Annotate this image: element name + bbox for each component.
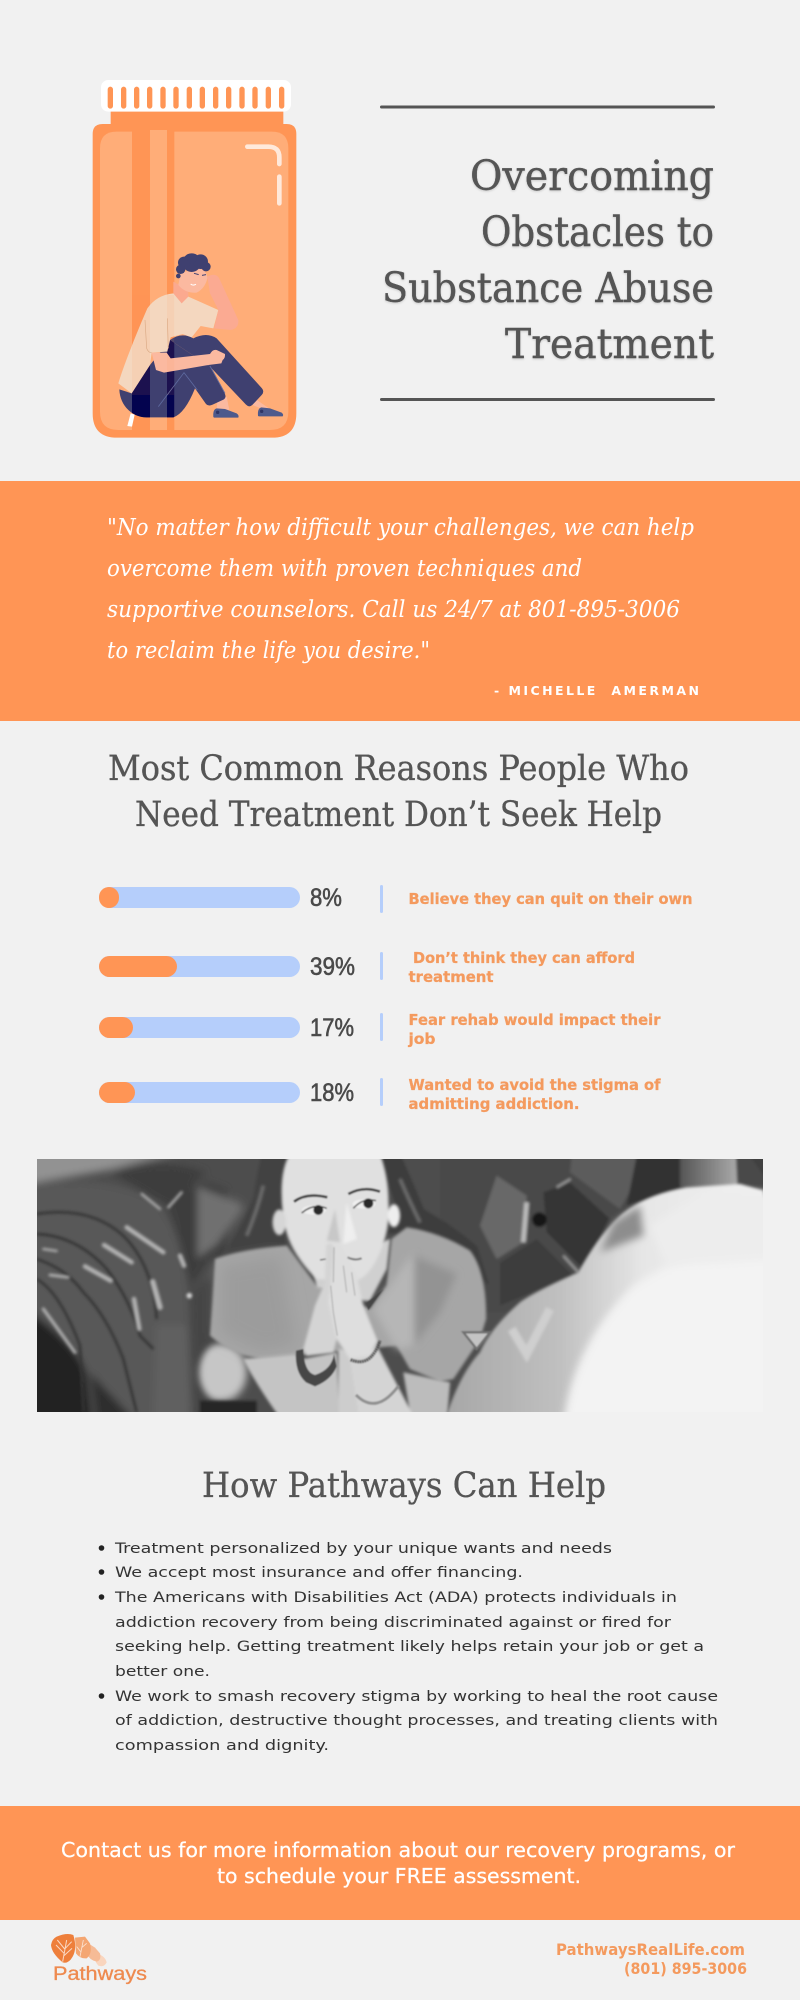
icon: pill bottle with seated person [93, 80, 296, 438]
sofa right [480, 1159, 763, 1304]
hair [230, 1159, 487, 1282]
panel: quote banner [0, 481, 800, 721]
row: 18%: admitting addiction. [408, 1095, 580, 1113]
woman [197, 1146, 489, 1422]
bullet list: better one. [115, 1664, 210, 1680]
bullet list: Treatment personalized by your unique wants and needs [114, 1541, 612, 1557]
hands [303, 1244, 377, 1359]
quote text: to reclaim the life you desire." [107, 638, 430, 664]
logo: Pathways leaves [51, 1934, 147, 1985]
row: 39%: treatment [408, 968, 494, 986]
contact details: PathwaysRealLife.com [556, 1940, 745, 1959]
row: 17%: Fear rehab would impact their [408, 1011, 661, 1029]
quote text [107, 515, 694, 664]
watch and bracelets [296, 1341, 399, 1403]
sofa highlights [43, 1192, 192, 1352]
quote attribution: - MICHELLE AMERMAN [494, 683, 699, 698]
hair [176, 253, 211, 278]
row: 8%: Believe they can quit on their own [408, 890, 692, 908]
row: 39%: 39% [310, 953, 355, 981]
quote text: overcome them with proven techniques and [107, 556, 582, 582]
panel: call to action banner: to schedule your FREE assessment. [217, 1864, 581, 1888]
title rules and heading: Overcoming [470, 152, 714, 200]
bullet list: We accept most insurance and offer financing. [115, 1565, 523, 1581]
row: 17%: 17% [310, 1014, 354, 1042]
arms [243, 1346, 452, 1412]
title rules and heading: Obstacles to [481, 208, 714, 256]
bullet list: addiction recovery from being discriminated against or fired for [115, 1615, 671, 1631]
eyes and brows [294, 1189, 380, 1260]
bottle body [93, 112, 296, 438]
bullet list [99, 1541, 718, 1754]
title rules and heading [380, 106, 715, 401]
title rules and heading: Treatment [505, 320, 714, 368]
row: 8%: 8% [310, 884, 342, 912]
face [273, 1146, 400, 1281]
bullet list: of addiction, destructive thought processes, and treating clients with [115, 1713, 718, 1729]
bullet list: seeking help. Getting treatment likely helps retain your job or get a [115, 1639, 704, 1655]
row: 18%: Wanted to avoid the stigma of [408, 1076, 661, 1094]
shirt [210, 1227, 486, 1382]
contact details: (801) 895-3006 [624, 1959, 747, 1978]
quote text: "No matter how difficult your challenges, we can help [107, 515, 694, 541]
row: 18%: 18% [310, 1079, 354, 1107]
row: 39%: Don’t think they can afford [413, 949, 635, 967]
seated person [118, 253, 283, 427]
row: 39% [99, 949, 635, 986]
panel: call to action banner [0, 1806, 800, 1920]
bullet list: We work to smash recovery stigma by working to heal the root cause [115, 1689, 718, 1705]
row: 8% [99, 884, 692, 913]
contact details [556, 1940, 747, 1978]
row: 18% [99, 1076, 661, 1113]
quote text: supportive counselors. Call us 24/7 at 801-895-3006 [107, 597, 680, 623]
row: 17% [99, 1011, 661, 1048]
bullet list: compassion and dignity. [115, 1738, 329, 1754]
logo: Pathways leaves: Pathways [53, 1964, 147, 1985]
row: 17%: job [407, 1030, 436, 1048]
bottle shine [247, 147, 279, 203]
heading: most common reasons: Need Treatment Don’t Seek Help [135, 795, 662, 835]
bottle cap [101, 80, 291, 112]
man shoulder [443, 1184, 777, 1426]
heading: most common reasons [108, 749, 689, 835]
bullet list: The Americans with Disabilities Act (ADA) protects individuals in [114, 1590, 677, 1606]
light area below left arm [200, 1344, 247, 1401]
title rules and heading: Substance Abuse [382, 264, 714, 312]
heading: most common reasons: Most Common Reasons People Who [108, 749, 689, 789]
panel: call to action banner: Contact us for more information about our recovery programs, or [61, 1838, 736, 1862]
bar chart: reasons [99, 884, 692, 1113]
sofa creases [37, 1212, 157, 1412]
neck [313, 1239, 390, 1301]
photo: woman in counselling session [37, 1159, 763, 1412]
heading: how pathways can help: How Pathways Can Help [202, 1466, 606, 1506]
sofa left [37, 1159, 226, 1412]
